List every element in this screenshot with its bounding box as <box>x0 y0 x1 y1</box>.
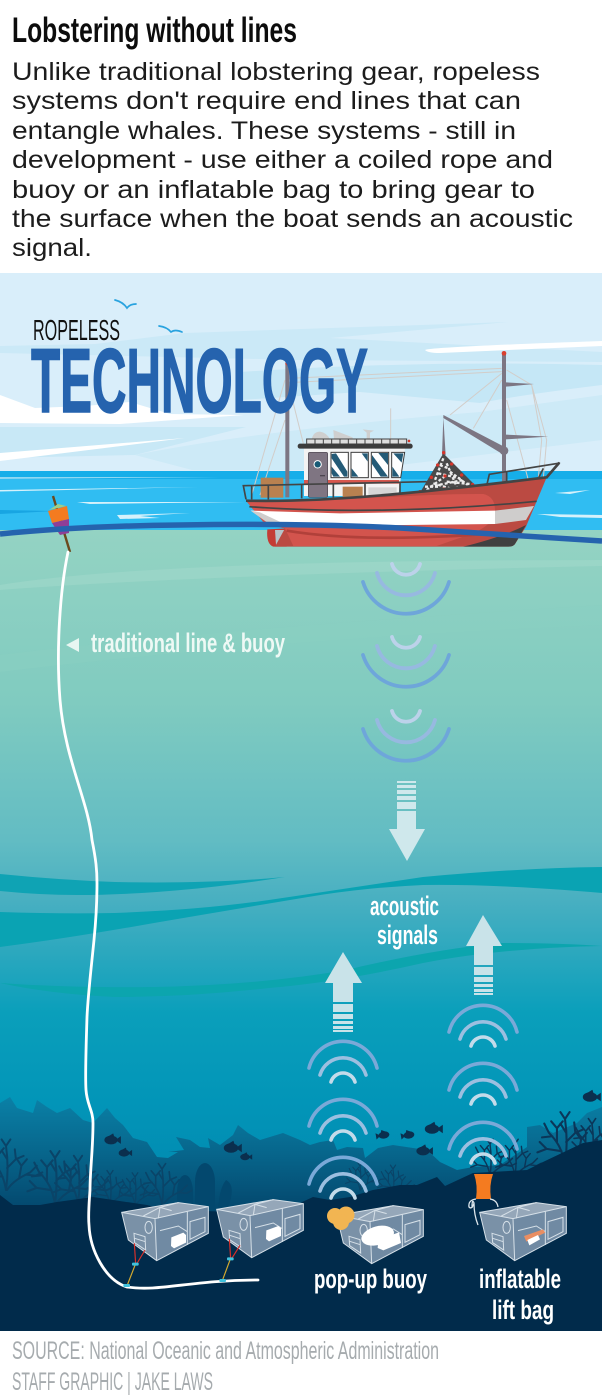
intro text block <box>12 58 573 262</box>
rigging wires <box>252 368 547 495</box>
arrow: up lift bag <box>466 915 502 995</box>
trap with end line 1 <box>122 1203 208 1287</box>
cabin <box>298 429 413 497</box>
label: traditional line & buoy: traditional line & buoy <box>91 628 285 658</box>
intro text block: Unlike traditional lobstering gear, ropeless <box>12 58 540 86</box>
reef background layers <box>0 1097 602 1260</box>
hull <box>246 463 559 547</box>
label: acoustic signals: signals <box>377 920 438 950</box>
seabed <box>0 1140 602 1331</box>
intro text block: the surface when the boat sends an acoustic <box>12 205 573 233</box>
sea surface <box>0 471 602 537</box>
source credits: STAFF GRAPHIC | JAKE LAWS <box>12 1368 213 1396</box>
crate <box>261 478 283 498</box>
masts and boom <box>285 351 548 497</box>
icon: orange lift bag <box>469 1174 498 1225</box>
label: acoustic signals <box>370 891 439 950</box>
heading: ropeless technology <box>31 315 368 432</box>
underwater background <box>0 530 602 1331</box>
label: acoustic signals: acoustic <box>370 891 439 921</box>
ascending arcs: pop-up buoy <box>309 1041 377 1198</box>
arrow: up pop-up buoy <box>325 952 362 1032</box>
source credits <box>12 1337 439 1396</box>
label: inflatable lift bag: inflatable <box>479 1264 561 1294</box>
label: pop-up buoy: pop-up buoy <box>314 1264 427 1294</box>
heading: ropeless technology: ROPELESS <box>33 315 120 347</box>
intro text block: systems don't require end lines that can <box>12 87 521 115</box>
intro text block: buoy or an inflatable bag to bring gear to <box>12 176 535 204</box>
fish <box>104 1090 601 1160</box>
descending acoustic arcs <box>363 564 449 761</box>
deck railing <box>243 463 558 499</box>
icon: seagulls <box>115 300 182 332</box>
buoy <box>48 496 70 552</box>
title: Lobstering without lines <box>12 11 297 50</box>
intro text block: signal. <box>12 234 92 262</box>
water surface line <box>0 524 602 541</box>
lift bag trap <box>469 1174 566 1261</box>
fishing boat <box>243 351 559 547</box>
net pile <box>418 451 478 493</box>
label: traditional line & buoy <box>66 628 285 658</box>
sky background <box>0 273 602 473</box>
coral silhouettes <box>0 1139 414 1205</box>
trap with end line 2 <box>217 1200 303 1282</box>
label: inflatable lift bag: lift bag <box>492 1295 554 1325</box>
intro text block: development - use either a coiled rope and <box>12 146 553 174</box>
icon: orange buoy float <box>327 1206 354 1230</box>
pop-up buoy trap <box>327 1206 423 1264</box>
traditional end line <box>58 552 258 1288</box>
arrow: down <box>389 781 425 861</box>
intro text block: entangle whales. These systems - still in <box>12 117 516 145</box>
ascending arcs: lift bag <box>449 1005 517 1163</box>
label: inflatable lift bag <box>479 1264 561 1325</box>
